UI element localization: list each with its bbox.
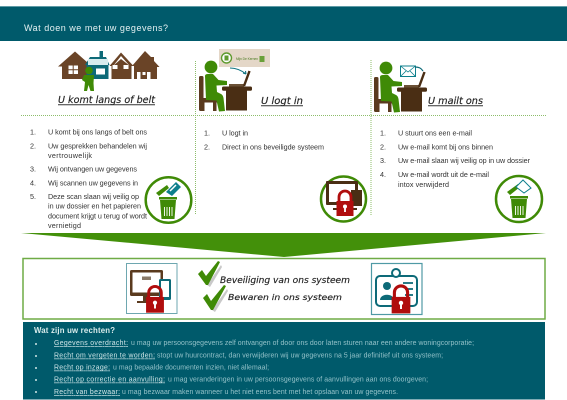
- icon: secured devices: [321, 176, 366, 222]
- list: mailt ons: 2.: [380, 142, 386, 152]
- list: komt langs of belt: in uw dossier en het papieren: [48, 202, 141, 210]
- icon: check mark two: [203, 285, 228, 312]
- rights title: Wat zijn uw rechten?: [34, 326, 115, 335]
- list: mailt ons: intox verwijderd: [398, 180, 449, 189]
- header band: [0, 6, 567, 41]
- icon: person at computer: [199, 61, 252, 112]
- list: logt in: Direct in ons beveiligde systeem: [222, 142, 324, 152]
- right: inzage: Recht op inzage:: [54, 364, 110, 372]
- list: komt langs of belt: 3.: [30, 164, 36, 174]
- icon: houses and office: [58, 51, 160, 91]
- icon: secured computer: [126, 264, 177, 314]
- heading: U mailt ons: U mailt ons: [428, 96, 483, 107]
- right: vergeten worden: Recht om vergeten te worden:: [54, 352, 155, 360]
- header title: Wat doen we met uw gegevens?: [24, 23, 168, 33]
- list: komt langs of belt: document krijgt u terug of wordt: [48, 212, 147, 220]
- column dividers: [21, 60, 546, 215]
- list: logt in: U logt in: [222, 128, 248, 138]
- list: mailt ons: 1.: [380, 128, 386, 138]
- list: komt langs of belt: U komt bij ons langs of belt ons: [48, 128, 147, 136]
- icon: website tag: Mijn De Kernen: [236, 57, 258, 61]
- text: Bewaren in ons systeem: Bewaren in ons systeem: [228, 292, 342, 302]
- heading: U komt langs of belt: U komt langs of belt: [58, 95, 156, 106]
- right: bezwaar: u mag bezwaar maken wanneer u het niet eens bent met het opslaan van uw gegevens.: [122, 389, 398, 396]
- icon: trash bin with document: [146, 177, 191, 223]
- icon: envelope: [400, 66, 423, 76]
- panel: rights: [23, 322, 545, 400]
- icon: check mark one: [198, 261, 222, 287]
- list: komt langs of belt: [30, 128, 147, 230]
- panel: security box: [23, 258, 545, 319]
- list: komt langs of belt: 5.: [30, 192, 36, 201]
- list: logt in: 2.: [204, 142, 210, 152]
- right: inzage: [35, 364, 269, 372]
- right: vergeten worden: stopt uw huurcontract, dan verwijderen wij uw gegevens na 5 jaar definitief uit ons systeem;: [157, 352, 443, 360]
- list: komt langs of belt: Wij scannen uw gegevens in: [48, 178, 138, 188]
- right: correctie en aanvulling: u mag veranderingen in uw persoonsgegevens of aanvullingen aan ons doorgeven;: [168, 376, 428, 384]
- arrow: large green funnel: [21, 233, 546, 257]
- list: mailt ons: Uw e-mail wordt uit de e-mail: [398, 170, 489, 179]
- icon: secured ID badge: [372, 264, 422, 314]
- list: komt langs of belt: 1.: [30, 128, 36, 136]
- list: mailt ons: Uw e-mail komt bij ons binnen: [398, 142, 493, 152]
- right: gegevens overdracht: Gegevens overdracht:: [54, 340, 128, 347]
- list: mailt ons: U stuurt ons een e-mail: [398, 128, 472, 138]
- list: komt langs of belt: 2.: [30, 142, 36, 150]
- right: correctie en aanvulling: [35, 376, 428, 384]
- icon: person at computer with e-mail: [374, 62, 427, 112]
- right: gegevens overdracht: u mag uw persoonsgegevens zelf ontvangen of door ons door laten sturen naar een andere woningcorporatie;: [131, 340, 474, 347]
- list: mailt ons: [380, 128, 531, 189]
- text: Beveiliging van ons systeem: Beveiliging van ons systeem: [220, 276, 350, 286]
- right: bezwaar: Recht van bezwaar:: [54, 389, 120, 396]
- heading: U logt in: U logt in: [261, 96, 303, 107]
- list: logt in: 1.: [204, 128, 210, 138]
- icon: trash bin with e-mail: [496, 176, 542, 222]
- list: komt langs of belt: Uw gesprekken behandelen wij: [48, 142, 147, 150]
- list: komt langs of belt: Deze scan slaan wij veilig op: [48, 192, 139, 201]
- arrow: login to computer: [230, 68, 246, 74]
- list: mailt ons: 4.: [380, 170, 386, 179]
- right: correctie en aanvulling: Recht op correctie en aanvulling:: [54, 376, 165, 384]
- icon: walking person: [82, 67, 94, 91]
- list: komt langs of belt: Wij ontvangen uw gegevens: [48, 164, 137, 174]
- list: logt in: [204, 128, 324, 152]
- list: komt langs of belt: vertrouwelijk: [48, 151, 92, 160]
- icon: website tag: [219, 49, 270, 67]
- list: komt langs of belt: vernietigd: [48, 221, 81, 230]
- list: mailt ons: 3.: [380, 156, 386, 165]
- list: mailt ons: Uw e-mail slaan wij veilig op in uw dossier: [398, 156, 531, 165]
- right: inzage: u mag bepaalde documenten inzien, niet allemaal;: [113, 364, 269, 372]
- list: komt langs of belt: 4.: [30, 178, 36, 188]
